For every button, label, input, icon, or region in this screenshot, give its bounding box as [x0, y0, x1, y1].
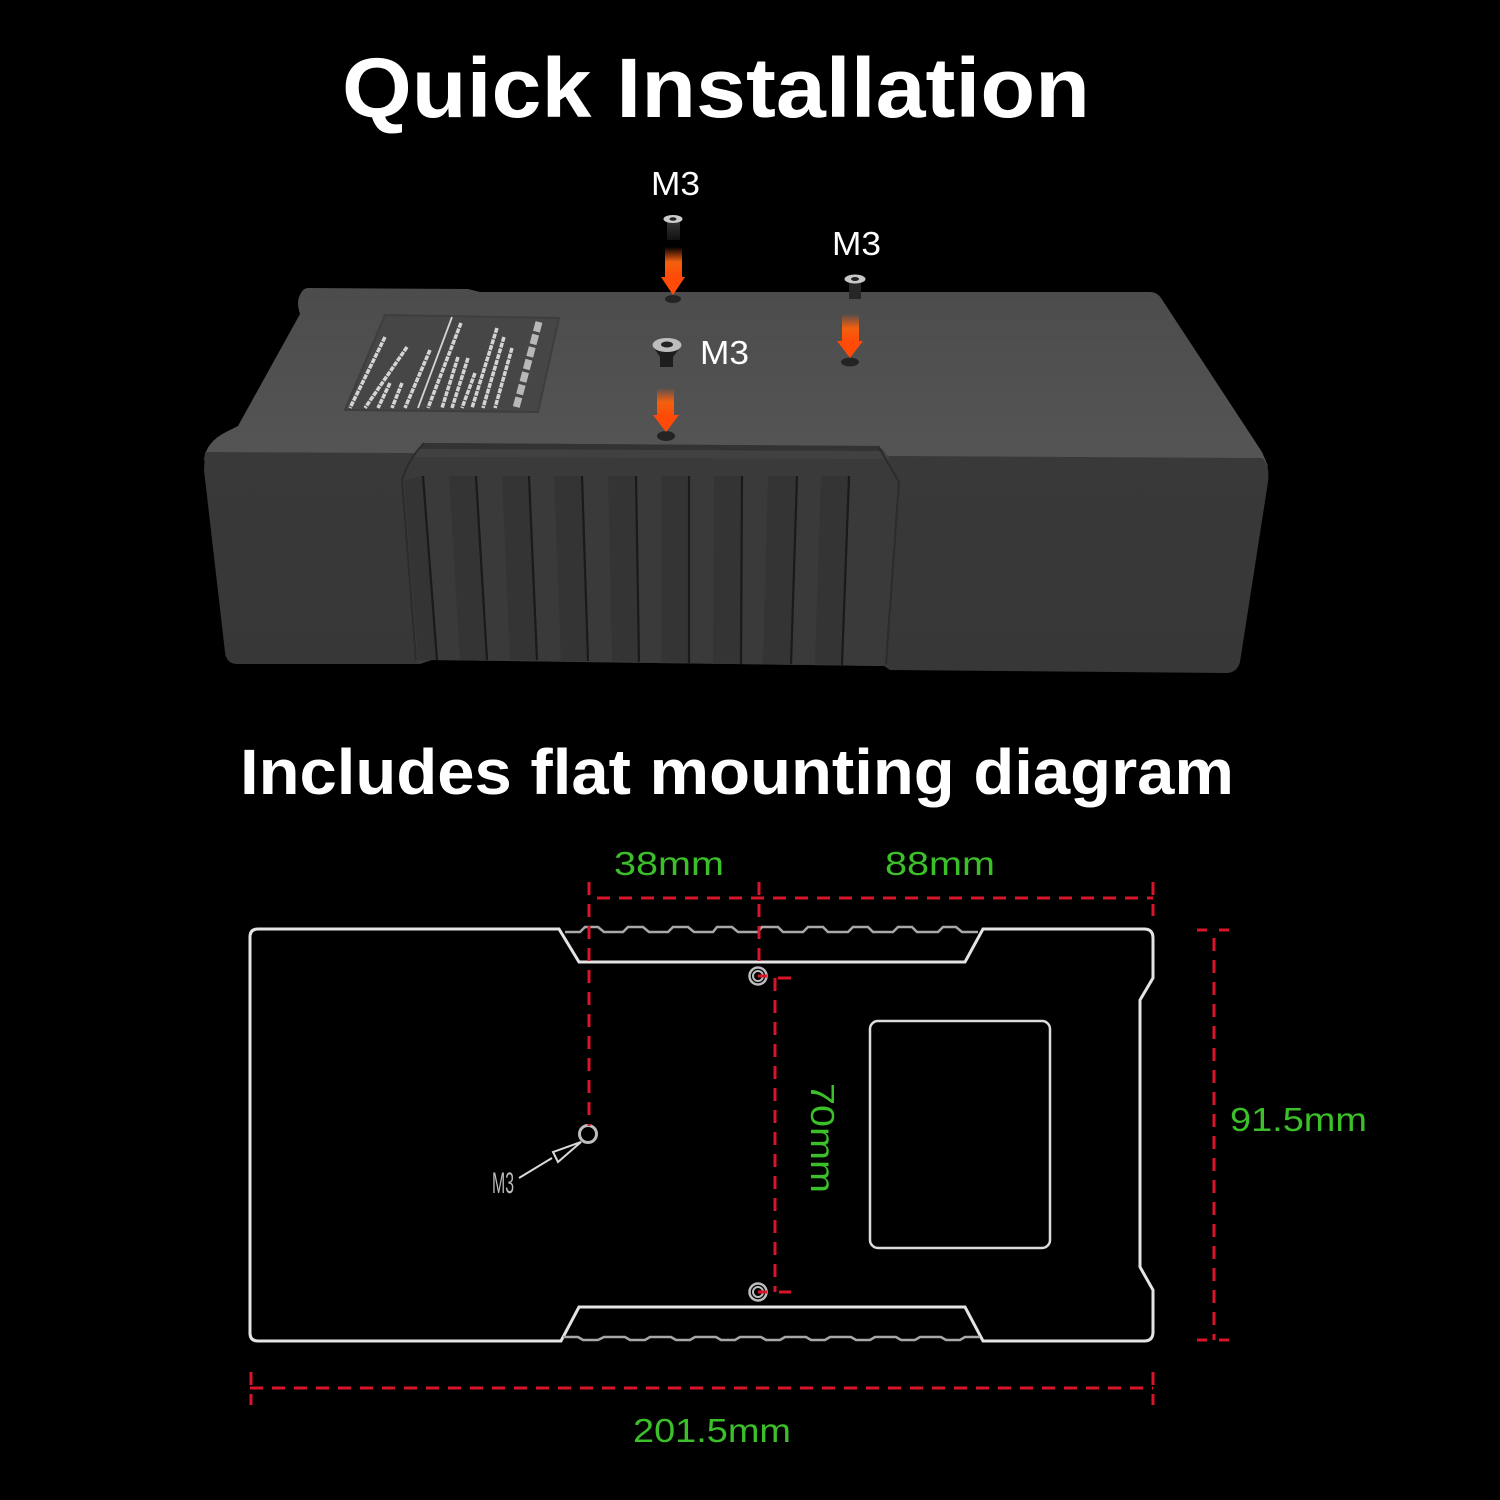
- product label plate: [345, 315, 559, 412]
- grille outline and groove lines: [402, 443, 899, 664]
- screw: middle: [652, 338, 682, 367]
- red dimension ticks: [758, 930, 1229, 1340]
- flat mounting diagram: [250, 845, 1367, 1449]
- front grille: [402, 443, 899, 666]
- product illustration: battery: [204, 165, 1268, 673]
- screw: top: [664, 215, 682, 240]
- battery top face: [204, 288, 1268, 466]
- arrow: middle screw: [653, 388, 679, 432]
- dimension: 201.5mm: 201.5mm: [633, 1412, 791, 1449]
- bottom ridge line: [563, 1337, 980, 1340]
- plate outline: [250, 929, 1153, 1341]
- centre window: [870, 1021, 1050, 1248]
- battery front face: [204, 452, 1268, 673]
- arrow: right screw: [837, 314, 863, 358]
- screw: right: [844, 274, 866, 299]
- label: M3 top: M3: [651, 165, 700, 202]
- red dimension lines: [250, 882, 1214, 1405]
- label: M3 right: M3: [832, 225, 881, 262]
- hole: left: [580, 1126, 596, 1142]
- hole: top: [750, 968, 766, 984]
- dimension: 70mm: 70mm: [804, 1083, 841, 1193]
- label: M3 drawing: M3: [492, 1167, 514, 1200]
- subtitle: Includes flat mounting diagram: [240, 736, 1234, 808]
- M3 leader arrow: [519, 1142, 581, 1178]
- arrow: top screw: [661, 247, 685, 295]
- label: M3 middle: M3: [700, 334, 749, 371]
- dimension: 91.5mm: 91.5mm: [1230, 1101, 1367, 1138]
- dimension: 38mm: 38mm: [614, 845, 724, 882]
- grille shaded ribs: [404, 476, 849, 665]
- hole: bottom: [750, 1284, 766, 1300]
- top ridge line: [565, 927, 978, 932]
- mounting holes: [657, 295, 859, 441]
- title: Quick Installation: [342, 41, 1090, 135]
- dimension: 88mm: 88mm: [885, 845, 995, 882]
